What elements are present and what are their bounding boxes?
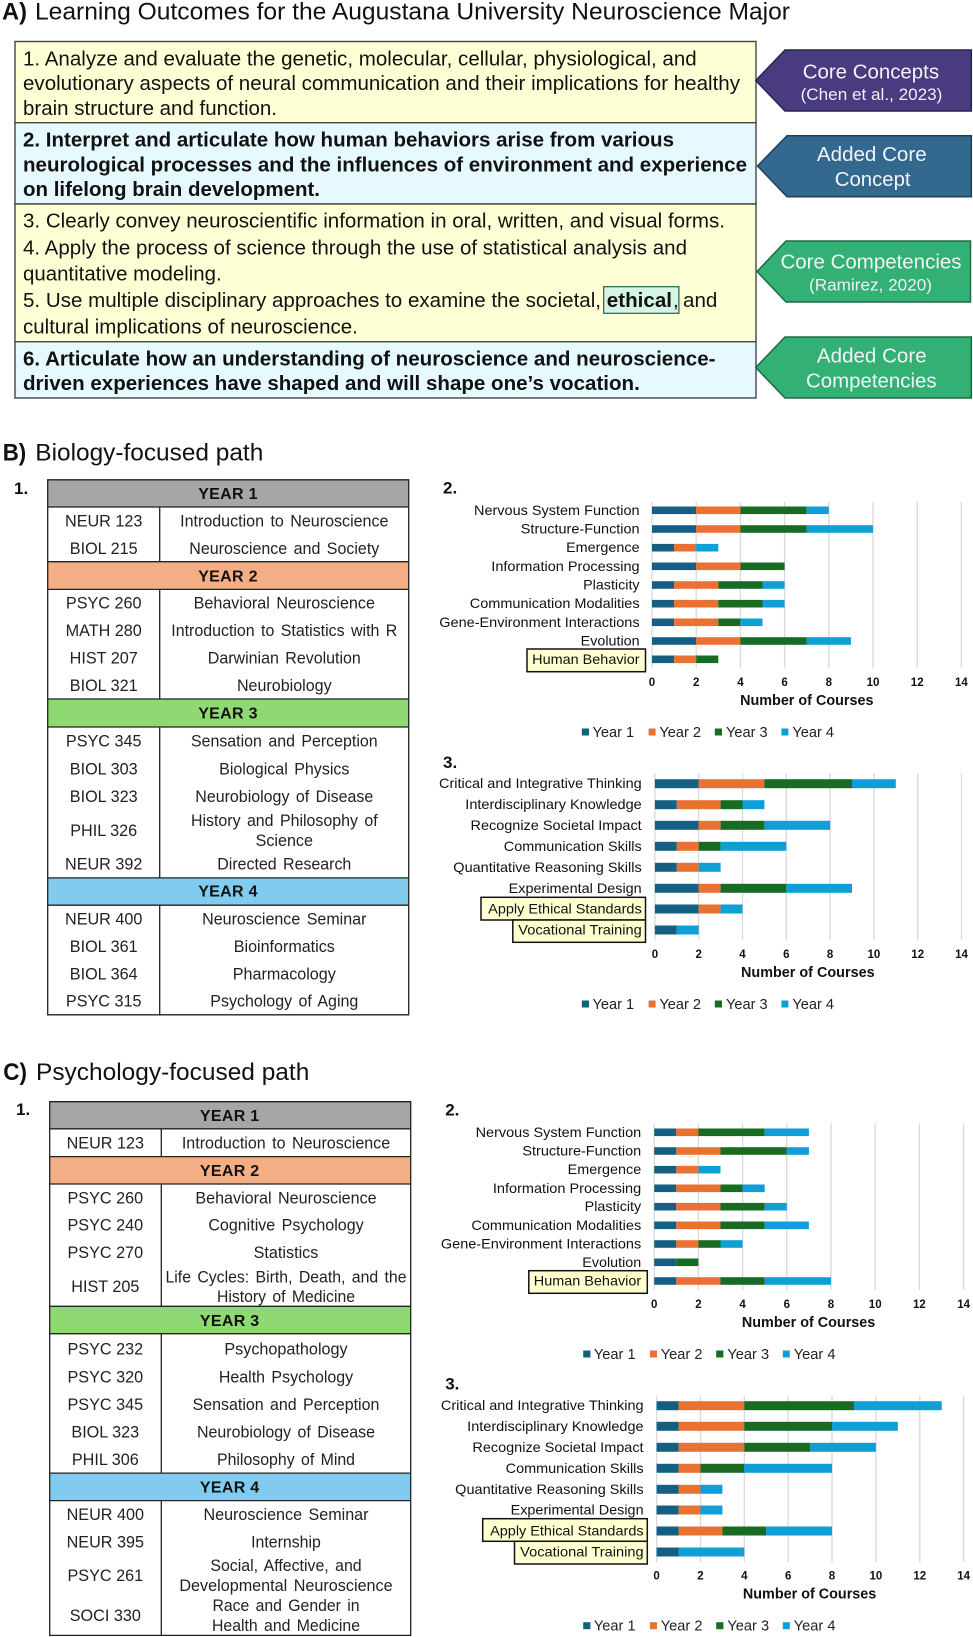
arrow tag: added core competencies: Added Core (817, 346, 927, 368)
outcomes 3 to 5 block (15, 204, 756, 342)
x axis C3: 0 (653, 1571, 660, 1583)
table: biology path courses: HIST 207 (70, 650, 138, 668)
x axis C3: 12 (913, 1571, 926, 1583)
legend B3: Year 1 (592, 997, 634, 1013)
table: biology path courses: BIOL 361 (70, 938, 138, 956)
heading C: Psychology-focused path (36, 1059, 309, 1086)
arrow tag: added core concept: Concept (835, 169, 911, 191)
x axis B2: 6 (781, 677, 788, 689)
category labels C2: Human Behavior (534, 1272, 642, 1288)
category labels C3: Communication Skills (506, 1460, 644, 1476)
arrow tag: added core competencies: Competencies (806, 371, 937, 393)
table: biology path courses: YEAR 2 (198, 568, 258, 585)
arrow tag: core competencies: (Ramirez, 2020) (809, 277, 932, 295)
table: psychology path courses: Health and Medicine (212, 1617, 360, 1635)
outcomes 3 to 5 block: ethical (607, 289, 672, 312)
heading B: B) (3, 440, 26, 467)
legend C2: Year 1 (594, 1347, 636, 1363)
x axis B3: 6 (783, 949, 790, 961)
table: biology path courses: NEUR 400 (65, 911, 142, 929)
table: biology path courses: History and Philosophy of (191, 812, 378, 830)
x axis B3: Number of Courses (741, 965, 875, 981)
legend B2: Year 1 (592, 725, 634, 741)
table: psychology path courses: Psychopathology (224, 1340, 349, 1358)
category labels B2 (439, 502, 640, 667)
table: psychology path courses: Statistics (254, 1244, 318, 1262)
category labels B3 (439, 775, 642, 938)
category labels C2: Communication Modalities (471, 1217, 641, 1233)
outcomes 3 to 5 block: 4. Apply the process of science through the use of statistical analysis and (23, 236, 687, 259)
stacked bars B3 (655, 779, 896, 934)
outcome 6 block: 6. Articulate how an understanding of neuroscience and neuroscience- (23, 348, 716, 371)
table: biology path courses: BIOL 364 (70, 966, 138, 984)
category labels C2: Plasticity (585, 1198, 641, 1214)
category labels B2: Evolution (581, 632, 640, 648)
x axis C2: 10 (869, 1299, 882, 1311)
table: psychology path courses: History of Medicine (217, 1288, 355, 1306)
outcome 1 block: 1. Analyze and evaluate the genetic, molecular, cellular, physiological, and (23, 48, 697, 70)
x axis C3: 8 (829, 1571, 836, 1583)
table: psychology path courses: YEAR 2 (200, 1163, 260, 1180)
panel A: learning outcomes (2, 0, 971, 398)
outcomes 3 to 5 block: 5. Use multiple disciplinary approaches to examine the societal, (23, 289, 601, 312)
table: psychology path courses: PSYC 320 (68, 1369, 143, 1387)
chart C3: core competencies by year: 3. (445, 1374, 459, 1394)
category labels C3: Apply Ethical Standards (490, 1522, 644, 1538)
category labels B3: Apply Ethical Standards (488, 900, 642, 916)
category labels B2: Plasticity (583, 576, 640, 592)
table: psychology path courses: BIOL 323 (71, 1424, 139, 1442)
table: psychology path courses: YEAR 1 (200, 1108, 260, 1125)
table: biology path courses: PSYC 345 (66, 733, 141, 751)
table: biology path courses: BIOL 215 (70, 540, 138, 558)
category labels C2 (441, 1124, 642, 1288)
x axis B2: 2 (693, 677, 699, 689)
table: biology path courses: Darwinian Revolution (208, 650, 361, 668)
table: psychology path courses: PSYC 232 (68, 1340, 143, 1358)
x axis C3: 10 (870, 1571, 882, 1583)
outcomes 3 to 5 block: quantitative modeling. (23, 263, 222, 286)
table: psychology path courses: Life Cycles: Birth, Death, and the (166, 1268, 406, 1286)
table: biology path courses: YEAR 4 (198, 884, 258, 901)
table: psychology path courses: YEAR 3 (200, 1313, 260, 1330)
x axis C3: 4 (741, 1571, 748, 1583)
x axis C2: 12 (913, 1299, 926, 1311)
table: biology path courses: Sensation and Perception (191, 733, 378, 751)
arrow tag: added core competencies (756, 337, 971, 398)
legend B2: Year 2 (659, 725, 701, 741)
table: biology path courses: PSYC 315 (66, 993, 141, 1011)
outcome 1 block: brain structure and function. (23, 97, 277, 120)
x axis B3: 10 (868, 949, 880, 961)
x axis B2: Number of Courses (740, 693, 874, 709)
x axis B2: 14 (955, 677, 968, 689)
table: psychology path courses: Philosophy of Mind (217, 1451, 355, 1469)
x axis C2: 0 (651, 1299, 657, 1311)
chart C3: core competencies by year (441, 1374, 971, 1635)
category labels C3: Interdisciplinary Knowledge (467, 1418, 644, 1434)
category labels B3: Communication Skills (504, 838, 642, 854)
x axis B2 (649, 677, 968, 709)
category labels C2: Evolution (582, 1254, 641, 1270)
category labels B2: Emergence (566, 539, 640, 555)
category labels C3: Quantitative Reasoning Skills (455, 1481, 644, 1497)
x axis C2: 6 (784, 1299, 790, 1311)
category labels C3 (441, 1397, 644, 1560)
x axis B3: 2 (695, 949, 702, 961)
table: psychology path courses: Cognitive Psychology (208, 1217, 365, 1235)
table: biology path courses: YEAR 1 (198, 486, 258, 503)
x axis C2: 14 (957, 1299, 971, 1311)
arrow tag: core concepts (756, 50, 971, 111)
table: biology path courses: Neurobiology of Disease (195, 788, 373, 806)
legend C2 (583, 1347, 835, 1363)
x axis C3 (653, 1571, 971, 1603)
table: biology path courses: Behavioral Neuroscience (194, 594, 375, 612)
x axis C2: 8 (828, 1299, 835, 1311)
outcome 6 block: driven experiences have shaped and will shape one’s vocation. (23, 372, 640, 395)
chart B3: core competencies by year: 3. (443, 753, 457, 772)
table: biology path courses: Directed Research (217, 856, 351, 874)
outcome 2 block: neurological processes and the influences of environment and experience (23, 154, 747, 177)
outcomes 3 to 5 block: and (683, 289, 717, 312)
table: biology path courses: BIOL 323 (70, 788, 138, 806)
category labels C3: Vocational Training (520, 1544, 644, 1560)
category labels B2: Human Behavior (532, 651, 640, 667)
table: biology path courses: NEUR 392 (65, 856, 142, 874)
x axis C3: 6 (785, 1571, 791, 1583)
arrow tag: core competencies: Core Competencies (780, 252, 962, 274)
highlight boxes: apply ethical standards and vocational training (483, 1519, 647, 1564)
table: biology path courses: Pharmacology (233, 966, 337, 984)
x axis B3: 12 (911, 949, 924, 961)
table: biology path courses: Introduction to Statistics with R (171, 622, 397, 640)
x axis B2: 10 (867, 677, 879, 689)
category labels B2: Structure-Function (521, 520, 640, 536)
chart B2: core concepts by year: 2. (443, 479, 457, 498)
outcomes 3 to 5 block: , (673, 289, 679, 312)
x axis B3: 14 (955, 949, 968, 961)
table: psychology path courses: Sensation and Perception (193, 1396, 379, 1414)
table: psychology path courses: Behavioral Neuroscience (195, 1189, 377, 1207)
x axis C2 (651, 1299, 971, 1331)
table: biology path courses: PHIL 326 (70, 822, 137, 840)
table: biology path courses: Neurobiology (237, 677, 333, 695)
stacked bars C3 (657, 1401, 942, 1556)
x axis B3: 4 (739, 949, 746, 961)
outcome 2 block (15, 123, 756, 204)
table: psychology path courses: PSYC 261 (68, 1567, 143, 1585)
table: psychology path courses: Social, Affective, and (210, 1557, 362, 1575)
stacked bars C2 (654, 1128, 831, 1285)
table: psychology path courses: NEUR 395 (67, 1533, 144, 1551)
table: biology path courses: BIOL 303 (70, 761, 138, 779)
legend C2: Year 2 (661, 1347, 702, 1363)
table: psychology path courses: Internship (251, 1533, 321, 1551)
table: biology path courses: Neuroscience Seminar (202, 911, 367, 929)
legend B2 (582, 725, 834, 741)
category labels B2: Gene-Environment Interactions (439, 614, 640, 630)
table: psychology path courses: PSYC 270 (68, 1244, 143, 1262)
table: biology path courses: Neuroscience and Society (189, 540, 380, 558)
highlight boxes: apply ethical standards and vocational training (481, 897, 646, 942)
highlight box: human behavior (527, 649, 646, 672)
table: biology path courses: YEAR 3 (198, 706, 258, 723)
legend B3 (582, 997, 834, 1013)
table: psychology path courses: HIST 205 (71, 1278, 139, 1296)
legend C3 (583, 1619, 835, 1635)
x axis B3 (652, 949, 968, 981)
outcome 1 block (15, 42, 756, 123)
category labels C3: Critical and Integrative Thinking (441, 1397, 644, 1413)
category labels C2: Information Processing (493, 1180, 641, 1196)
table: psychology path courses: Neuroscience Seminar (204, 1506, 369, 1524)
x axis B3: 0 (652, 949, 658, 961)
x axis B2: 8 (826, 677, 833, 689)
legend B2: Year 4 (792, 725, 834, 741)
panel number B1: 1. (14, 479, 28, 498)
arrow tag: core concepts: Core Concepts (803, 61, 939, 83)
table: biology path courses: Bioinformatics (234, 938, 335, 956)
table: biology path courses: Biological Physics (219, 761, 349, 779)
x axis C2: Number of Courses (742, 1315, 875, 1331)
table: psychology path courses: PSYC 260 (68, 1189, 143, 1207)
table: psychology path courses: NEUR 123 (67, 1135, 144, 1153)
table: biology path courses: MATH 280 (66, 622, 142, 640)
category labels C3: Experimental Design (511, 1502, 644, 1518)
table: psychology path courses: NEUR 400 (67, 1506, 144, 1524)
arrow tag: core concepts: (Chen et al., 2023) (801, 86, 942, 104)
table: biology path courses: Introduction to Neuroscience (180, 512, 388, 530)
category labels B2: Communication Modalities (470, 595, 640, 611)
heading B: Biology-focused path (35, 440, 263, 467)
table: psychology path courses: PSYC 240 (68, 1217, 143, 1235)
table: biology path courses: NEUR 123 (65, 512, 142, 530)
table: biology path courses (48, 480, 409, 1015)
table: biology path courses: PSYC 260 (66, 594, 141, 612)
chart B2: core concepts by year (439, 479, 968, 741)
x axis B2: 12 (911, 677, 924, 689)
category labels C2: Emergence (568, 1161, 641, 1177)
table: psychology path courses: Neurobiology of Disease (197, 1424, 375, 1442)
table: biology path courses: Science (256, 832, 313, 850)
table: biology path courses: BIOL 321 (70, 677, 138, 695)
category labels B3: Critical and Integrative Thinking (439, 775, 642, 791)
chart C2: core concepts by year (441, 1100, 971, 1363)
category labels C3: Recognize Societal Impact (472, 1439, 644, 1455)
legend C3: Year 1 (594, 1619, 636, 1635)
category labels B2: Information Processing (491, 558, 640, 574)
table: psychology path courses: YEAR 4 (200, 1480, 260, 1497)
legend C2: Year 4 (794, 1347, 835, 1363)
category labels B3: Quantitative Reasoning Skills (453, 859, 642, 875)
panel number C1: 1. (16, 1100, 30, 1119)
chart C2: core concepts by year: 2. (445, 1100, 459, 1120)
x axis C3: 14 (957, 1571, 971, 1583)
legend B2: Year 3 (726, 725, 768, 741)
table: psychology path courses: Health Psychology (219, 1369, 354, 1387)
x axis C3: 2 (697, 1571, 704, 1583)
arrow tag: added core concept (758, 136, 971, 197)
legend B3: Year 3 (726, 997, 768, 1013)
legend B3: Year 2 (659, 997, 701, 1013)
legend C3: Year 4 (794, 1619, 835, 1635)
legend C2: Year 3 (727, 1347, 769, 1363)
table: psychology path courses: SOCI 330 (70, 1607, 141, 1625)
stacked bars B2 (652, 506, 873, 663)
category labels B3: Vocational Training (518, 922, 642, 938)
table: psychology path courses: Introduction to Neuroscience (182, 1135, 390, 1153)
outcome 6 block (15, 342, 756, 398)
arrow tag: core competencies (757, 241, 970, 302)
category labels B3: Interdisciplinary Knowledge (465, 796, 642, 812)
category labels B3: Recognize Societal Impact (470, 817, 642, 833)
category labels C2: Gene-Environment Interactions (441, 1236, 641, 1252)
chart B3: core competencies by year (439, 753, 968, 1013)
legend C3: Year 2 (661, 1619, 702, 1635)
x axis C3: Number of Courses (743, 1587, 876, 1603)
table: biology path courses: Psychology of Aging (210, 993, 358, 1011)
highlight box: human behavior (529, 1271, 647, 1293)
outcomes 3 to 5 block: 3. Clearly convey neuroscientific information in oral, written, and visual forms. (23, 210, 725, 233)
outcome 1 block: evolutionary aspects of neural communication and their implications for healthy (23, 72, 741, 95)
table: psychology path courses: PHIL 306 (72, 1451, 139, 1469)
x axis B2: 4 (737, 677, 744, 689)
x axis C2: 4 (739, 1299, 746, 1311)
heading C: C) (3, 1059, 27, 1086)
outcome 2 block: on lifelong brain development. (23, 178, 320, 201)
table: psychology path courses (50, 1102, 411, 1635)
table: psychology path courses: Developmental Neuroscience (179, 1577, 393, 1595)
category labels B3: Experimental Design (509, 880, 642, 896)
arrow tag: added core concept: Added Core (817, 144, 927, 166)
category labels C2: Structure-Function (522, 1142, 641, 1158)
legend B3: Year 4 (792, 997, 834, 1013)
x axis B3: 8 (827, 949, 834, 961)
x axis B2: 0 (649, 677, 655, 689)
category labels C2: Nervous System Function (476, 1124, 641, 1140)
table: psychology path courses: Race and Gender in (212, 1597, 360, 1615)
legend C3: Year 3 (727, 1619, 769, 1635)
table: psychology path courses: PSYC 345 (68, 1396, 143, 1414)
outcome 2 block: 2. Interpret and articulate how human behaviors arise from various (23, 129, 674, 152)
category labels B2: Nervous System Function (474, 502, 640, 518)
outcomes 3 to 5 block: cultural implications of neuroscience. (23, 315, 358, 338)
x axis C2: 2 (695, 1299, 702, 1311)
